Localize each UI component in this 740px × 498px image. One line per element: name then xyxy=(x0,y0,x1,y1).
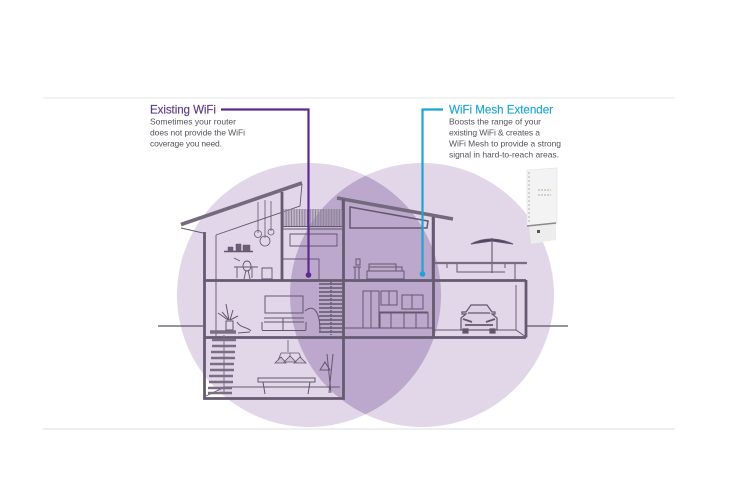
staircase upper xyxy=(319,282,342,335)
connector: mesh extender xyxy=(420,110,443,277)
text: existing wifi: Sometimes your router xyxy=(150,117,236,127)
roof deck xyxy=(435,263,527,280)
kitchen xyxy=(344,291,433,328)
pendant lights xyxy=(254,200,274,246)
wifi coverage circles xyxy=(177,163,554,427)
text: wifi mesh extender: existing WiFi & creates a xyxy=(449,128,540,138)
connector: existing wifi xyxy=(221,110,311,278)
living room sofa xyxy=(237,296,320,333)
right roof xyxy=(337,198,453,219)
stair landing xyxy=(210,330,236,334)
potted plant xyxy=(218,304,238,330)
lower staircase xyxy=(208,335,236,394)
car xyxy=(461,305,497,333)
house walls and floors xyxy=(204,192,526,398)
ground lines xyxy=(158,325,568,327)
desk and chair xyxy=(234,258,272,279)
left roof xyxy=(181,183,302,224)
dining pendant xyxy=(275,340,306,363)
text: wifi mesh extender: Boosts the range of your xyxy=(449,116,541,126)
text: existing wifi xyxy=(150,104,245,149)
patio umbrella xyxy=(471,238,513,273)
text: existing wifi: coverage you need. xyxy=(150,139,222,149)
text: existing wifi: Existing WiFi xyxy=(150,104,216,116)
lamp and tall vases xyxy=(320,354,333,393)
text: wifi mesh extender: WiFi Mesh to provide a strong xyxy=(449,139,561,149)
bedroom xyxy=(353,259,404,279)
icon: wifi extender device xyxy=(527,168,557,244)
dining bench xyxy=(258,378,315,394)
text: wifi mesh extender: WiFi Mesh Extender xyxy=(449,104,553,116)
text: wifi mesh extender xyxy=(449,104,561,160)
upper slatted screen xyxy=(283,209,342,226)
text: wifi mesh extender: signal in hard-to-reach areas. xyxy=(449,150,559,160)
house cross-section xyxy=(158,183,568,398)
shelf with books xyxy=(224,244,253,252)
text: existing wifi: does not provide the WiFi xyxy=(150,128,245,138)
